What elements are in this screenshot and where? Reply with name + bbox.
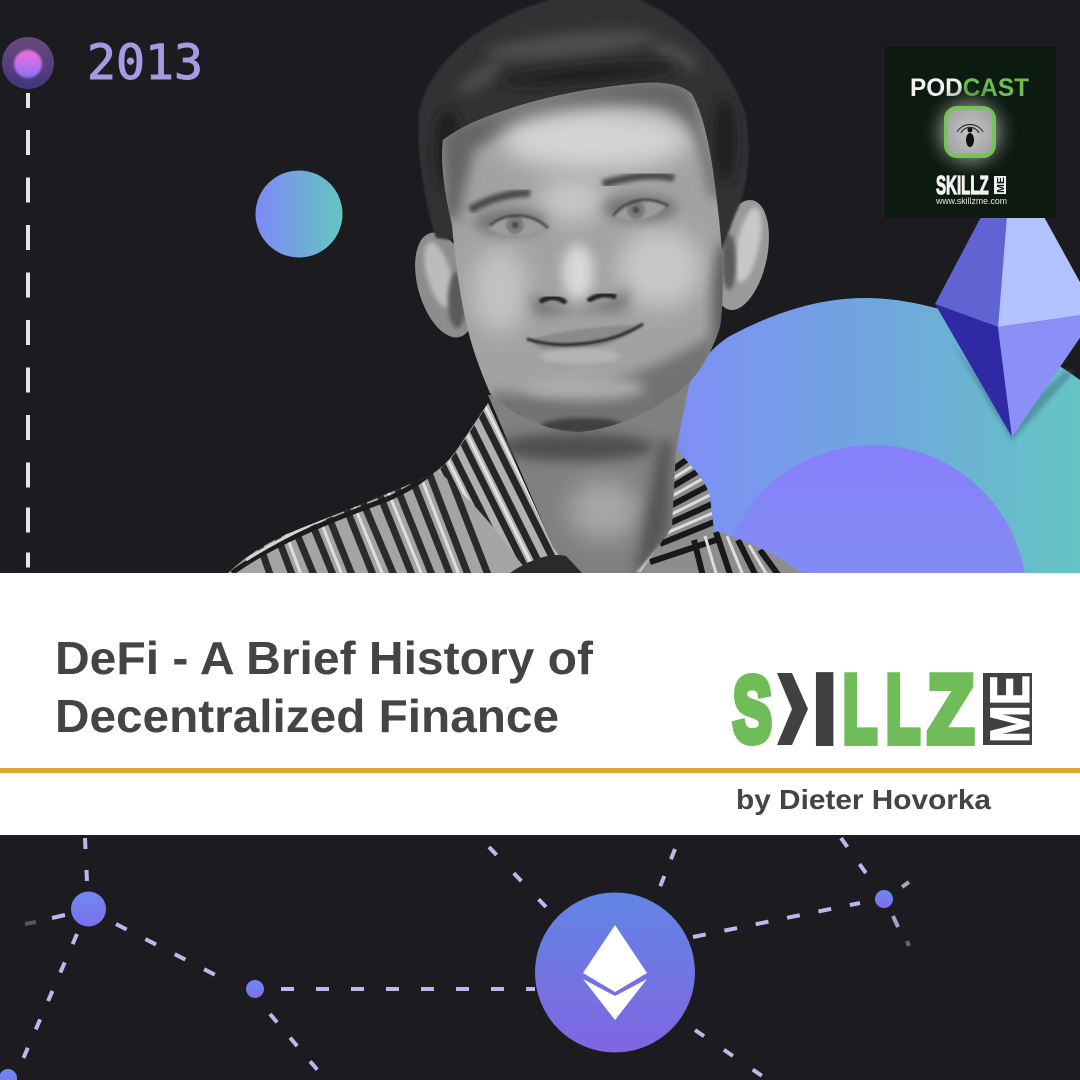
byline: by Dieter Hovorka	[736, 784, 991, 815]
portrait	[220, 0, 810, 580]
shirt collar right with stripes	[640, 450, 802, 573]
face	[442, 82, 723, 432]
logo: SKILLZ ME: ME	[978, 675, 1041, 743]
logo: SKILLZ ME: S	[733, 658, 772, 761]
cheek highlights	[472, 246, 528, 334]
chin beard	[541, 418, 625, 434]
year label: 2013	[87, 35, 203, 91]
collar left stripes	[438, 403, 558, 566]
left eye	[488, 216, 548, 236]
inner purple circle	[732, 445, 1025, 573]
left ear	[415, 232, 468, 338]
network connections	[20, 838, 909, 1080]
ethereum logo	[583, 925, 647, 1020]
dashed timeline line	[26, 93, 30, 573]
decorative gradient circle	[256, 170, 342, 258]
podcast title: PODCAST	[910, 74, 1029, 102]
panel: dark network background	[0, 835, 1080, 1080]
jaw stubble	[490, 333, 714, 432]
collar tip	[510, 555, 582, 573]
logo: SKILLZ ME: I	[814, 656, 835, 763]
forehead highlight	[500, 110, 690, 170]
title: DeFi - A Brief History of	[55, 632, 594, 684]
panel: white title band	[0, 573, 1080, 835]
title: Decentralized Finance	[55, 690, 559, 742]
logo: SKILLZ ME: Z	[928, 657, 974, 763]
timeline node	[2, 37, 54, 89]
left eyebrow	[470, 193, 530, 210]
website: www.skillzme.com	[935, 196, 1007, 206]
mouth	[527, 324, 643, 364]
neck	[488, 370, 692, 573]
logo: SKILLZ ME: L	[886, 655, 920, 763]
right ear	[722, 200, 769, 310]
right eyebrow	[603, 176, 674, 184]
nose	[530, 244, 630, 315]
skillz me small wordmark: ME	[996, 177, 1007, 193]
right cheek stubble shadow	[705, 237, 723, 346]
panel: dark hero background	[0, 0, 1080, 573]
logo: SKILLZ ME: L	[843, 655, 877, 763]
hairline shadow	[440, 79, 722, 220]
eye sockets	[474, 209, 546, 235]
network nodes	[0, 890, 893, 1080]
ethereum coin	[535, 892, 695, 1052]
shirt left with stripes	[220, 400, 582, 580]
hair	[418, 0, 748, 250]
shoulder seam	[232, 472, 432, 573]
bridge highlight	[538, 178, 606, 222]
gold divider	[0, 768, 1080, 773]
ethereum crystal	[935, 215, 1080, 441]
right eye	[612, 200, 668, 220]
large gradient blob	[672, 298, 1080, 573]
skillz me small wordmark: SKILLZ	[936, 171, 989, 200]
undershirt	[636, 535, 666, 573]
panel: podcast badge	[885, 47, 1056, 218]
timeline	[2, 35, 203, 573]
podcast icon	[920, 82, 1020, 182]
logo: SKILLZ ME	[733, 655, 1041, 763]
